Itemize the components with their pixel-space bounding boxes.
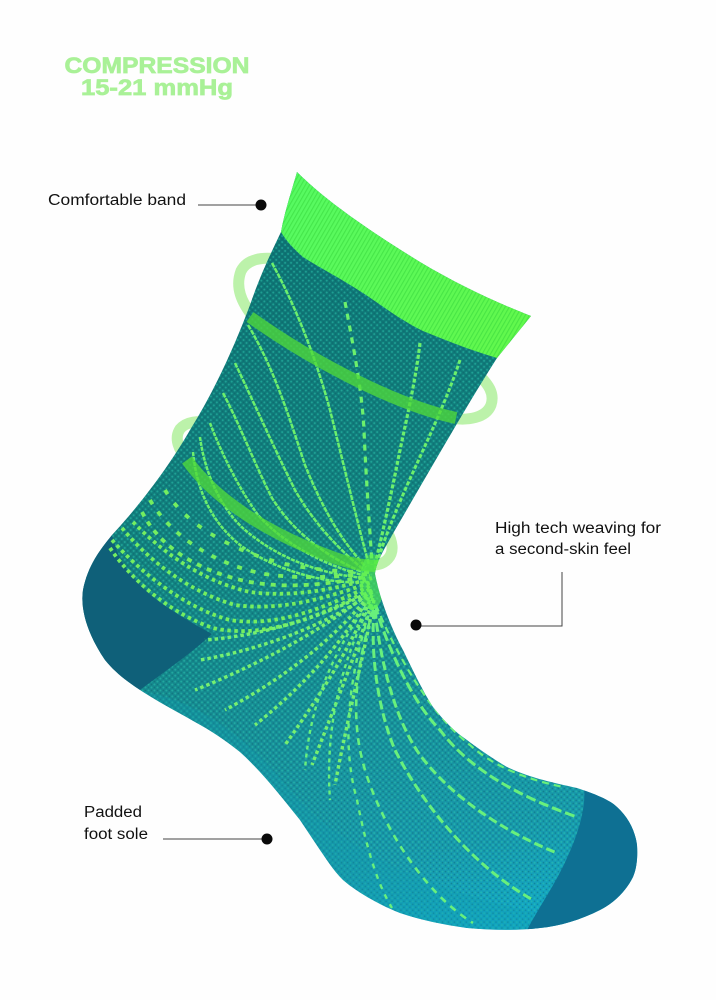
lower hub lines <box>195 590 374 785</box>
callout: high tech weaving: High tech weaving for <box>495 520 661 537</box>
callout: high tech weaving <box>410 520 661 630</box>
callout: padded foot sole: foot sole <box>84 826 148 843</box>
heel dotted arcs <box>110 490 372 631</box>
callout: high tech weaving: a second-skin feel <box>495 541 631 558</box>
cuff band <box>281 172 531 358</box>
toe patch <box>528 790 638 930</box>
callout: comfortable band: Comfortable band <box>48 192 186 209</box>
title: compression rating <box>64 53 250 100</box>
callout: padded foot sole: Padded <box>84 804 142 821</box>
callout: padded foot sole <box>84 804 272 844</box>
padded sole shading <box>141 690 532 930</box>
woven texture <box>70 170 650 940</box>
title: compression rating: 15-21 mmHg <box>81 75 233 100</box>
foot dashed lines <box>305 600 577 923</box>
sock <box>70 170 650 940</box>
radiating upper lines <box>193 263 460 582</box>
heel patch <box>70 535 212 692</box>
front bands of the compression rings <box>187 317 456 566</box>
cuff ribbing <box>281 172 531 358</box>
sock details <box>70 170 650 940</box>
sock body <box>82 172 637 930</box>
callout: comfortable band <box>48 192 266 210</box>
compression rings behind the sock <box>177 258 492 565</box>
title: compression rating: COMPRESSION <box>64 53 250 78</box>
hub glow <box>360 554 382 610</box>
